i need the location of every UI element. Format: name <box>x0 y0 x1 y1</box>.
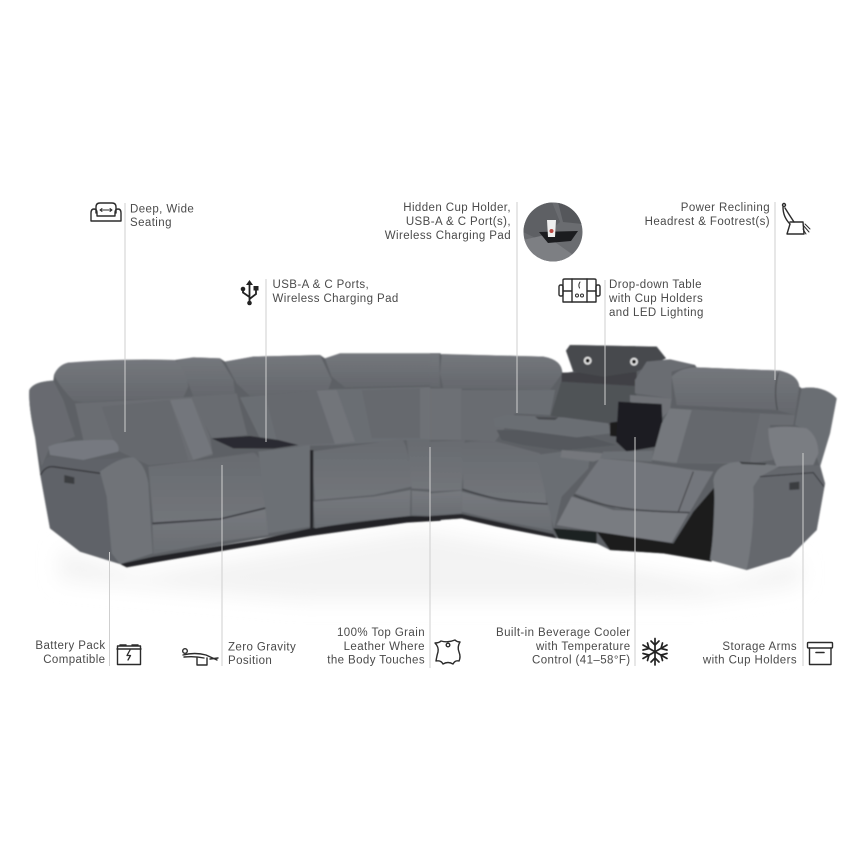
black cooler <box>616 402 663 452</box>
label: storage arms: Storage Arms <box>722 641 797 653</box>
left arm back <box>29 381 75 467</box>
label: drop-down table: and LED Lighting <box>609 307 704 319</box>
drop-down table <box>497 430 617 451</box>
right recliner headrest <box>672 367 799 415</box>
rear-right headrest <box>635 359 695 398</box>
sofa: left section <box>29 353 441 567</box>
armrest lid <box>48 440 119 460</box>
icon: leather hide <box>435 640 460 664</box>
label: deep wide seating: Seating <box>130 217 172 229</box>
label: beverage cooler: with Temperature <box>535 641 630 653</box>
icon: zero gravity <box>183 649 218 665</box>
headrest pieces <box>177 357 235 397</box>
right arm back <box>795 388 837 467</box>
console <box>258 445 311 533</box>
right recliner back <box>652 408 795 463</box>
backs <box>75 397 213 465</box>
second seat <box>312 439 412 500</box>
drop-down table recess <box>551 380 637 425</box>
label: drop-down table: with Cup Holders <box>608 293 703 305</box>
left seat <box>148 453 268 523</box>
corner seat <box>430 440 465 492</box>
icon: storage box <box>808 642 832 664</box>
label: top grain leather: 100% Top Grain <box>337 627 425 639</box>
icon: snowflake <box>643 638 667 665</box>
label: zero gravity: Zero Gravity <box>228 642 296 654</box>
label: storage arms: with Cup Holders <box>702 654 797 666</box>
label: zero gravity: Position <box>228 655 272 667</box>
raised center headrest with lights <box>566 345 666 377</box>
footrest <box>575 458 713 512</box>
sofa: right section <box>430 345 837 570</box>
corner headrest <box>430 354 440 387</box>
label: hidden cup holder: Wireless Charging Pad <box>385 230 511 242</box>
icon: usb <box>241 280 258 305</box>
dark console top <box>212 436 298 449</box>
armrest lid <box>768 427 818 467</box>
label: battery pack: Battery Pack <box>35 640 106 652</box>
icon: recliner <box>782 204 810 234</box>
footrest void <box>597 487 715 562</box>
icon: drop-down table sofa <box>559 279 600 302</box>
right arm body <box>747 465 825 570</box>
label: deep wide seating: Deep, Wide <box>130 204 194 216</box>
label: beverage cooler: Built-in Beverage Cooler <box>496 627 630 639</box>
icon: sofa wide seating <box>91 203 121 221</box>
label: top grain leather: Leather Where <box>344 641 425 653</box>
icon: battery <box>117 645 141 664</box>
label: usb ports: Wireless Charging Pad <box>272 293 399 305</box>
left seat <box>462 441 547 503</box>
corner back <box>430 388 462 440</box>
corner seat <box>407 440 441 490</box>
floor shadow <box>60 530 800 600</box>
label: drop-down table: Drop-down Table <box>609 279 702 291</box>
label: hidden cup holder: Hidden Cup Holder, <box>403 202 511 214</box>
leader lines <box>110 202 803 668</box>
base shadow strip <box>120 516 441 567</box>
right silhouette <box>430 345 837 570</box>
label: power reclining: Headrest & Footrest(s) <box>645 216 770 228</box>
left silhouette <box>29 353 441 564</box>
label: top grain leather: the Body Touches <box>327 654 425 666</box>
photo: cup holder detail <box>523 202 583 262</box>
arm body <box>40 457 153 564</box>
label: usb ports: USB-A & C Ports, <box>272 279 369 291</box>
label: battery pack: Compatible <box>43 654 106 666</box>
label: hidden cup holder: USB-A & C Port(s), <box>406 216 511 228</box>
label: power reclining: Power Reclining <box>681 202 770 214</box>
label: beverage cooler: Control (41–58°F) <box>532 654 630 666</box>
